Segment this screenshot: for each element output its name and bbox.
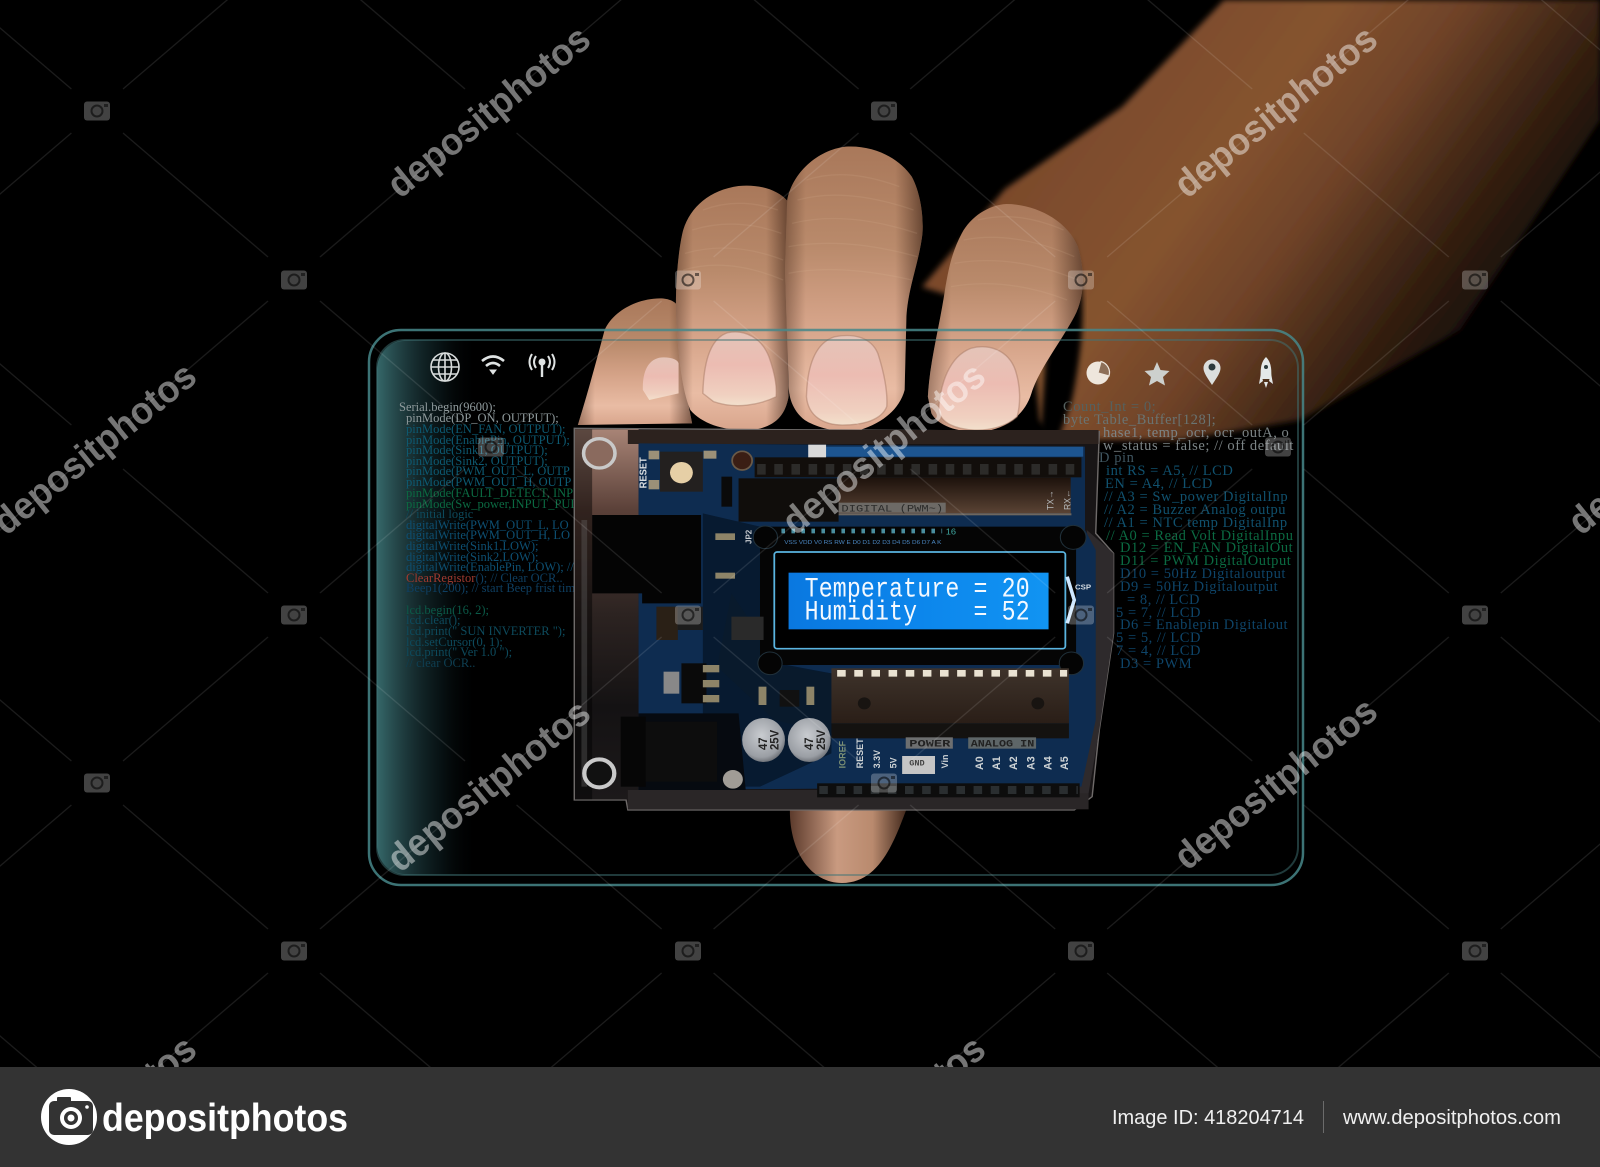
panel: right code listing: // A1 = NTC temp DigitalInp <box>1104 515 1288 531</box>
footer bar <box>0 1067 1600 1167</box>
board labels: POWER <box>909 739 951 751</box>
panel: left code listing: digitalWrite(Sink2,LOW); <box>406 550 538 564</box>
forearm behind the hand <box>922 0 1600 440</box>
index finger <box>928 204 1083 432</box>
ring finger <box>676 186 789 430</box>
panel: left code listing: pinMode(FAULT_DETECT, INPU <box>406 486 582 500</box>
digital header: DIGITAL (PWM~) <box>841 504 943 515</box>
brand name: depositphotos <box>102 1097 348 1140</box>
panel: left code listing: // clear OCR.. <box>406 656 475 670</box>
capacitors: 25V <box>815 730 828 750</box>
icon: antenna <box>530 354 554 377</box>
glass panel glow <box>377 340 1298 875</box>
panel: left code listing: digitalWrite(Sink1,LOW); <box>406 539 538 553</box>
panel: right code listing: 7 = 4, // LCD <box>1116 643 1201 659</box>
board labels: A0 <box>974 756 986 770</box>
panel: right code listing: 5 = 7, // LCD <box>1116 605 1201 621</box>
lcd module: 16 <box>946 527 956 537</box>
panel: left code listing: lcd.print(" SUN INVERTER "); <box>406 624 565 638</box>
capacitors <box>742 718 831 762</box>
usb connector <box>592 515 701 603</box>
lcd module: CSP <box>1075 583 1091 591</box>
panel: right code listing: D11 = PWM DigitalOutput <box>1120 553 1291 569</box>
shadow between index finger and arm <box>1040 240 1083 440</box>
panel: left code listing: pinMode(Sw_power,INPUT_PUL <box>406 497 578 511</box>
board labels: IOREF <box>837 741 848 768</box>
panel: left code listing: pinMode(EN_FAN, OUTPUT); <box>406 422 565 436</box>
icon: depositphotos logo <box>41 1089 97 1145</box>
board labels: ANALOG IN <box>971 739 1034 751</box>
icon: star <box>1144 362 1170 386</box>
panel: right code listing: D12 = EN_FAN DigitalOut <box>1120 540 1293 556</box>
panel: right code listing: 5 = 5, // LCD <box>1116 630 1201 646</box>
panel: right code listing: byte Table_Buffer[128]; <box>1063 412 1216 428</box>
digital header: TX→ <box>1045 490 1056 510</box>
panel: right code listing: = 8, // LCD <box>1127 592 1200 608</box>
board labels: RESET <box>855 738 865 768</box>
icon: rocket <box>1259 357 1273 388</box>
hand gripping the board from above <box>578 147 1083 432</box>
little finger <box>578 298 692 425</box>
capacitors: 25V <box>768 730 782 750</box>
depositphotos watermarks: depositphotos <box>379 692 599 880</box>
lcd module <box>760 527 1091 665</box>
panel: left code listing: pinMode(Sink2, OUTPUT); <box>406 454 548 468</box>
lcd screws <box>753 525 1086 675</box>
panel: right code listing: // A0 = Read Volt DigitalInpu <box>1106 528 1294 544</box>
panel: right code listing: hase1, temp_ocr, ocr_outA, o <box>1103 425 1289 441</box>
watermark camera icons <box>84 102 1488 960</box>
small components <box>656 533 814 789</box>
board labels: A4 <box>1042 756 1055 770</box>
website url: www.depositphotos.com <box>1342 1107 1561 1129</box>
board labels: 5V <box>888 757 898 768</box>
capacitors: 47 <box>803 737 816 750</box>
lcd module: VSS VDD V0 RS RW E D0 D1 D2 D3 D4 D5 D6 D7 A K <box>784 540 942 546</box>
panel: left code listing: ClearRegistor(); // Clear OCR.. <box>406 571 563 585</box>
acrylic case <box>574 428 1114 810</box>
panel: left code listing: lcd.begin(16, 2); <box>406 603 489 617</box>
board labels: Vin <box>940 754 950 768</box>
panel: right code listing: D10 = 50Hz Digitaloutput <box>1120 566 1286 582</box>
board labels: 3.3V <box>872 749 882 768</box>
jp2 label: JP2 <box>743 529 753 544</box>
lcd reading: humidity: Humidity = 52 <box>805 597 1030 628</box>
panel: left code listing: pinMode(DP_ON, OUTPUT); <box>406 411 559 425</box>
icon: wifi <box>482 356 504 374</box>
panel: right code listing: D pin <box>1099 450 1135 466</box>
panel: left code listing: lcd.print(" Ver 1.0 "); <box>406 645 512 659</box>
panel: left code listing: pinMode(EnablePin, OUTPUT); <box>406 433 570 447</box>
panel: right code listing: D3 = PWM <box>1120 656 1192 672</box>
panel: right code listing: int RS = A5, // LCD <box>1106 463 1233 479</box>
analog header <box>831 668 1069 738</box>
image id: Image ID: 418204714 <box>1112 1107 1304 1129</box>
depositphotos watermarks: depositphotos <box>774 355 994 543</box>
icon: location pin <box>1204 360 1220 385</box>
divider <box>1323 1101 1324 1133</box>
reset button <box>638 451 716 492</box>
blue circuit board <box>639 443 1096 790</box>
panel: left code listing: pinMode(Sink1, OUTPUT); <box>406 443 548 457</box>
panel: left code listing: Serial.begin(9600); <box>399 400 496 414</box>
barrel jack <box>621 717 717 787</box>
depositphotos watermarks: depositphotos <box>1166 690 1386 878</box>
depositphotos watermarks: depositphotos <box>1166 18 1386 206</box>
panel: right code listing: D6 = Enablepin Digitalout <box>1120 617 1288 633</box>
panel: right code listing: EN = A4, // LCD <box>1105 476 1213 492</box>
thumb below the board <box>790 805 908 883</box>
depositphotos watermarks: depositphotos <box>379 18 599 206</box>
board labels <box>837 737 1071 774</box>
panel: right code listing: D9 = 50Hz Digitaloutput <box>1120 579 1278 595</box>
panel: left code listing: digitalWrite(EnablePin, LOW); // <box>406 560 574 574</box>
digital header: RX← <box>1062 489 1073 510</box>
board labels: GND <box>909 760 925 768</box>
panel: left code listing: pinMode(PWM_OUT_H, OUTP <box>406 475 571 489</box>
icon: pie chart <box>1086 362 1110 384</box>
reset button: RESET <box>638 457 650 488</box>
panel: left code listing: lcd.clear(); <box>406 613 460 627</box>
board labels: A3 <box>1025 756 1037 770</box>
panel: right code listing: // A2 = Buzzer Analog outpu <box>1104 502 1286 518</box>
glass panel frame <box>369 330 1303 885</box>
arduino board with acrylic case <box>574 428 1114 810</box>
board labels: A1 <box>991 756 1003 770</box>
board labels: A5 <box>1059 756 1071 770</box>
panel: right code listing <box>1063 399 1294 672</box>
panel: left code listing: lcd.setCursor(0, 1); <box>406 635 503 649</box>
panel: left code listing: digitalWrite(PWM_OUT_H, LO <box>406 528 570 542</box>
panel: right code listing: // A3 = Sw_power DigitalInp <box>1104 489 1288 505</box>
panel: left code listing: Beep1(200); // start Beep frist tim <box>406 581 575 595</box>
panel: left code listing: digitalWrite(PWM_OUT_L, LO <box>406 518 569 532</box>
mounting holes <box>584 439 752 787</box>
panel: right code listing: Count_Int = 0; <box>1063 399 1156 415</box>
panel: left code listing: // initial logic <box>406 507 474 521</box>
capacitors: 47 <box>757 737 770 750</box>
bottom header <box>817 783 1080 797</box>
icon: globe <box>431 353 459 381</box>
board labels: A2 <box>1008 756 1020 770</box>
panel: left code listing <box>399 400 582 670</box>
middle finger <box>785 147 923 432</box>
lcd blue screen <box>789 573 1049 629</box>
panel: left code listing: pinMode(PWM_OUT_L, OUTP <box>406 464 570 478</box>
digital header <box>721 457 1081 522</box>
lcd reading: temperature: Temperature = 20 <box>805 574 1030 605</box>
panel: right code listing: w_status = false; // off default <box>1103 438 1294 454</box>
